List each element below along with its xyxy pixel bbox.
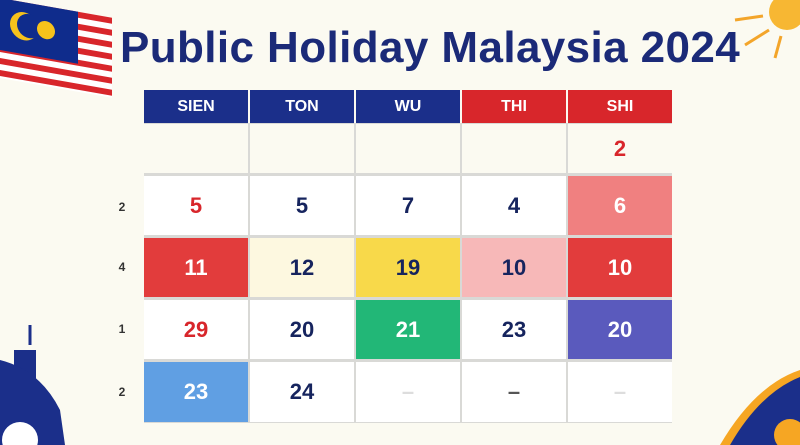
- calendar grid: 24: [290, 379, 314, 404]
- calendar grid: SHI: [607, 98, 633, 114]
- calendar grid: 19: [396, 254, 420, 280]
- calendar grid: 10: [608, 254, 632, 280]
- calendar grid: 5: [190, 192, 202, 218]
- calendar grid: 21: [396, 316, 420, 342]
- icon: sun: [734, 0, 800, 58]
- calendar grid: 1: [119, 322, 125, 336]
- title: Public Holiday Malaysia 2024: [120, 23, 740, 72]
- calendar grid: 4: [508, 192, 520, 218]
- calendar grid: –: [614, 379, 626, 404]
- calendar grid: 23: [502, 316, 526, 342]
- calendar grid: 2: [119, 385, 125, 399]
- icon: malaysian flag: [0, 0, 112, 98]
- calendar grid: –: [402, 379, 414, 404]
- calendar grid: –: [508, 379, 520, 404]
- calendar grid: 2: [614, 136, 626, 160]
- calendar grid: 23: [184, 379, 208, 404]
- calendar grid: 20: [608, 316, 632, 342]
- calendar grid: 2: [119, 200, 125, 214]
- calendar grid: THI: [501, 98, 527, 114]
- calendar grid: 7: [402, 192, 414, 218]
- calendar grid: SIEN: [177, 98, 215, 114]
- calendar grid: TON: [285, 98, 319, 114]
- calendar grid: 4: [119, 260, 125, 274]
- icon: corner ornament: [720, 370, 800, 445]
- calendar grid: 20: [290, 316, 314, 342]
- calendar grid: 5: [296, 192, 308, 218]
- icon: decorative building ornament: [0, 325, 65, 445]
- calendar grid: 11: [184, 254, 208, 280]
- calendar grid: WU: [395, 98, 421, 114]
- calendar grid: 29: [184, 316, 208, 342]
- calendar grid: 10: [502, 254, 526, 280]
- calendar grid: 12: [290, 254, 314, 280]
- calendar grid: 6: [614, 192, 626, 218]
